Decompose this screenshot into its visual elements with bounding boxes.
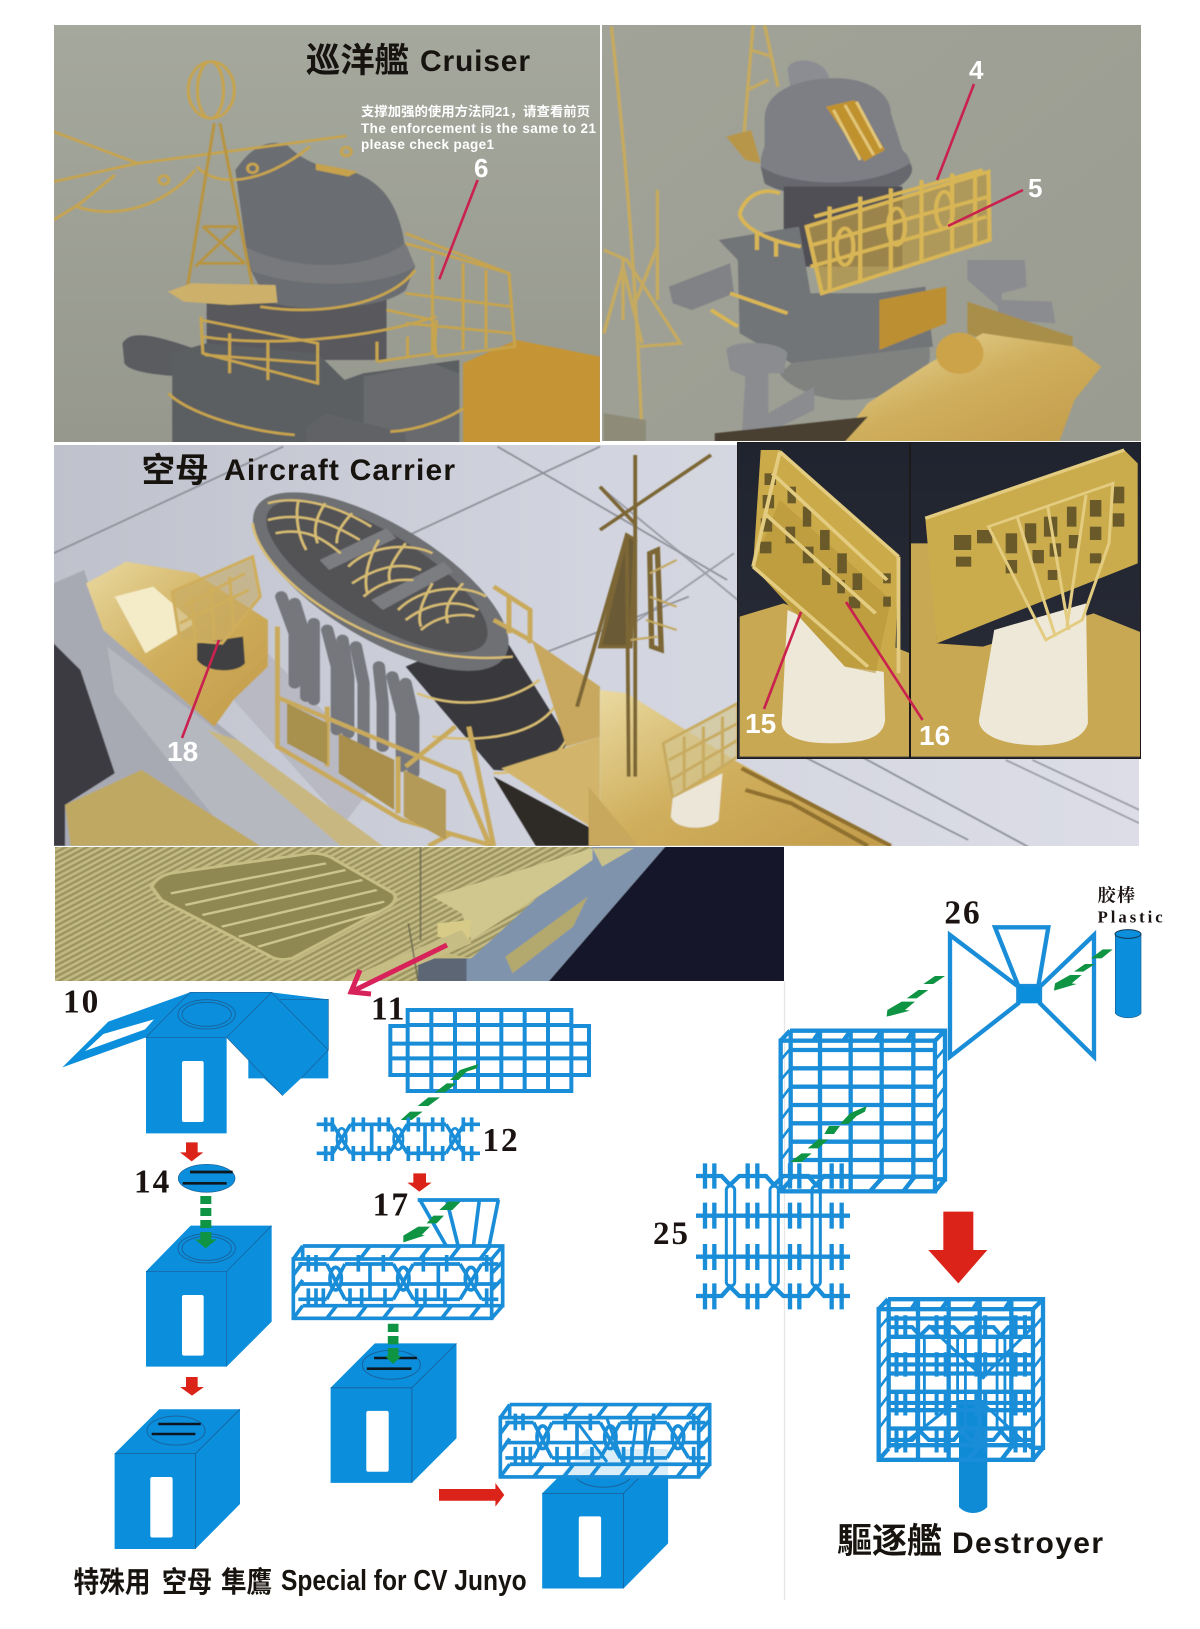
arrow: green to bowtie — [1054, 949, 1113, 991]
panel: aircraft carrier photo — [54, 445, 1140, 860]
inset: radar closeups — [737, 442, 1143, 759]
arrow: red down 1 — [180, 1142, 203, 1161]
panel: cruiser/carrier diagram column left — [62, 984, 328, 1396]
photo: white cylinder — [671, 773, 722, 828]
number 10: 10 — [63, 984, 100, 1021]
photo: gold walkway — [207, 730, 383, 846]
label plastic: 胶棒 — [1098, 886, 1135, 906]
photo: small radar right — [663, 703, 738, 798]
arrow: green 17 — [403, 1202, 461, 1242]
arrow: big red down — [928, 1212, 987, 1283]
panel: cruiser photo left — [54, 25, 600, 443]
number 26: 26 — [944, 894, 982, 931]
note text — [361, 104, 596, 152]
photo: radar closeup right — [910, 443, 1143, 758]
panel: destroyer diagram — [696, 886, 1163, 1309]
note text: please check page1 — [361, 137, 494, 152]
arrow: green to grid — [887, 976, 945, 1017]
callout 6: 6 — [474, 153, 488, 183]
photo: funnel gold grids — [253, 500, 570, 773]
photo: radar small — [172, 557, 260, 643]
photo: radar frame — [711, 170, 990, 327]
callout 18 — [167, 640, 219, 767]
photo: dark sea corner — [549, 847, 786, 981]
photo: deck seams — [54, 447, 1052, 860]
photo: carrier mast — [577, 455, 711, 777]
photo: frame plates — [287, 703, 446, 840]
arrow: red down 2 — [180, 1377, 204, 1396]
part 25: strip panel — [696, 1163, 850, 1309]
photo: antenna wires — [408, 847, 420, 981]
part: 3D grid — [781, 1031, 945, 1191]
title: cruiser — [306, 42, 530, 76]
photo: grey tower — [669, 60, 1055, 440]
number 14: 14 — [134, 1163, 171, 1200]
title: cruiser: Cruiser — [420, 45, 530, 78]
arrow: green dashed down 1 — [195, 1196, 217, 1248]
part 10: unfolded box — [62, 992, 328, 1133]
part 26: bowtie — [950, 927, 1094, 1057]
photo: perforated deck edge — [341, 848, 634, 981]
number 25: 25 — [653, 1216, 690, 1252]
photo: gold deck — [463, 340, 600, 443]
callout 16 — [846, 602, 950, 751]
callout 5: 5 — [1028, 173, 1042, 203]
panel: flight deck photo — [55, 847, 786, 981]
photo: gold platform — [168, 283, 277, 305]
note text: The enforcement is the same to 21 — [361, 121, 596, 136]
callout 5 — [948, 173, 1042, 226]
photo: grey bridge tower — [122, 142, 460, 442]
number 11: 11 — [371, 990, 406, 1027]
box 3 with disc — [115, 1409, 240, 1549]
arrow: pink pointer — [351, 945, 447, 994]
title: aircraft carrier: 空母 — [142, 452, 209, 490]
title: destroyer — [837, 1522, 1103, 1561]
callout 6 — [439, 153, 488, 279]
photo: gold deck — [715, 287, 1101, 442]
label plastic: Plastic — [1098, 908, 1163, 927]
photo: gold grille on dome — [826, 100, 885, 162]
title: special for CV Junyo: 隼鷹 — [221, 1566, 272, 1599]
divider line — [784, 981, 786, 1600]
arrow: green 11 to 12 — [401, 1064, 478, 1120]
part 11: flat grid — [390, 1010, 589, 1091]
photo: gold funnel frames — [276, 587, 530, 846]
title: special for CV Junyo: Special for CV Junyo — [281, 1565, 527, 1597]
arrow: red right — [439, 1483, 504, 1507]
callout 4: 4 — [969, 55, 984, 85]
number 12: 12 — [482, 1122, 520, 1159]
photo: radar closeup left — [738, 443, 910, 758]
assembled box with rack — [500, 1405, 710, 1588]
number 17: 17 — [373, 1187, 410, 1224]
photo: gold mast and rails — [54, 62, 515, 435]
photo: dark slot and right deck — [494, 640, 600, 846]
title: destroyer: 驅逐艦 — [837, 1522, 942, 1561]
photo: exhaust pipes — [281, 597, 413, 773]
photo: deck right — [600, 690, 891, 846]
photo: funnel — [221, 460, 568, 770]
box 4 with disc — [331, 1343, 456, 1483]
part: plastic rod — [1115, 930, 1141, 1018]
part 17: trapezoid — [418, 1200, 499, 1247]
title: aircraft carrier — [144, 452, 455, 486]
title: aircraft carrier: Aircraft Carrier — [224, 454, 455, 487]
title: destroyer: Destroyer — [952, 1527, 1103, 1560]
title: special for CV Junyo — [74, 1565, 527, 1599]
title: special for CV Junyo: 特殊用 — [74, 1566, 150, 1599]
callout 15: 15 — [745, 708, 776, 739]
label plastic — [1098, 886, 1163, 927]
arrow: green dashed down 2 — [385, 1324, 402, 1364]
photo: hull blue-grey — [418, 847, 665, 981]
arrow: green 25 to grid — [790, 1106, 867, 1162]
callout 18: 18 — [167, 736, 198, 767]
photo: seam lines right — [600, 487, 1140, 823]
photo: gold deck upper left — [86, 562, 268, 727]
photo: grey hull — [54, 570, 383, 846]
title: special for CV Junyo: 空母 — [162, 1566, 212, 1599]
photo: gold masts left — [604, 25, 778, 440]
title: cruiser: 巡洋艦 — [306, 42, 409, 80]
photo: radar pedestal — [197, 637, 245, 670]
photo: gold deck lower left — [65, 770, 260, 846]
panel: rack assembly diagram — [293, 990, 589, 1318]
note text: 支撑加强的使用方法同21，请查看前页 — [361, 104, 590, 119]
arrow: red down 3 — [407, 1173, 432, 1192]
callout 15 — [745, 612, 801, 739]
callout 4 — [937, 55, 984, 180]
photo: deck railing — [742, 768, 891, 846]
part 12: strip — [317, 1117, 480, 1161]
part: 3D rack — [293, 1246, 503, 1318]
photo: hatch panel — [151, 853, 395, 959]
panel: cruiser photo right — [602, 25, 1141, 442]
part 14: disc — [178, 1164, 235, 1192]
assembled destroyer radar — [879, 1299, 1043, 1513]
box 2 with socket — [146, 1226, 272, 1367]
callout 16: 16 — [919, 720, 950, 751]
